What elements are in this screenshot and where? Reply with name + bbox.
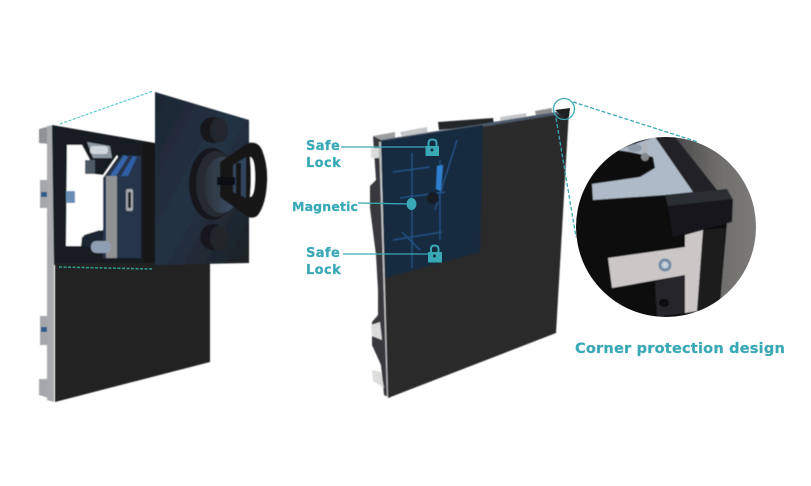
knob upper bbox=[200, 117, 228, 143]
label: Magnetic bbox=[292, 199, 358, 214]
leader line bbox=[343, 253, 430, 255]
label: Safe bbox=[306, 246, 340, 261]
removed LED module with suction handle bbox=[155, 92, 267, 265]
left cabinet lower LED panel bbox=[55, 263, 210, 402]
upper silver plate bbox=[592, 137, 693, 200]
label: Safe bbox=[306, 139, 340, 154]
callout: safe lock top bbox=[306, 139, 439, 171]
dark band bbox=[655, 137, 717, 192]
top fixing bbox=[87, 142, 112, 158]
callout: magnetic bbox=[292, 198, 416, 214]
left cabinet frame rail bbox=[47, 125, 54, 402]
left cabinet side brackets bbox=[39, 126, 50, 398]
left dashed guide bottom bbox=[59, 267, 152, 269]
corner guard on panel bbox=[555, 108, 570, 119]
callout: safe lock top: Lock bbox=[306, 156, 341, 171]
knob lower bbox=[200, 224, 228, 250]
caption: Corner protection design bbox=[575, 341, 785, 357]
center cabinet rear frame bbox=[370, 108, 552, 398]
handle bbox=[217, 143, 267, 218]
magnifier background bbox=[576, 137, 728, 317]
corner guard bbox=[665, 189, 733, 237]
side lock bbox=[66, 191, 75, 203]
icon: lock bbox=[426, 140, 439, 156]
left cabinet open frame bbox=[52, 125, 155, 265]
leader line bbox=[341, 146, 428, 148]
hanging lock bbox=[85, 160, 95, 174]
module plates bbox=[103, 155, 141, 258]
icon: magnet dot bbox=[406, 198, 416, 210]
silver bracket bbox=[608, 230, 703, 313]
gray LED face bbox=[675, 138, 756, 299]
lower black block bbox=[655, 275, 685, 317]
bolt bbox=[628, 143, 649, 161]
callout: safe lock bottom: Lock bbox=[306, 263, 341, 278]
suction cup bbox=[189, 148, 240, 220]
translucent blue section bbox=[381, 125, 483, 278]
small corner magnifier ring bbox=[554, 98, 574, 120]
leader line bbox=[358, 203, 411, 204]
left cabinet assembly bbox=[39, 92, 267, 402]
dashed guide to magnifier lower bbox=[556, 118, 576, 237]
raised LED module bbox=[155, 92, 249, 265]
callout: safe lock bottom bbox=[306, 246, 442, 278]
lower lock bbox=[81, 230, 106, 250]
frame opening bbox=[66, 145, 118, 246]
icon: lock bbox=[428, 246, 442, 262]
center cabinet bbox=[370, 108, 569, 398]
black strip bbox=[698, 228, 725, 310]
corner detail magnifier bbox=[576, 137, 756, 317]
left dashed guide top bbox=[60, 91, 153, 124]
dashed guide to magnifier bbox=[573, 102, 698, 142]
center LED panel bbox=[381, 110, 569, 398]
